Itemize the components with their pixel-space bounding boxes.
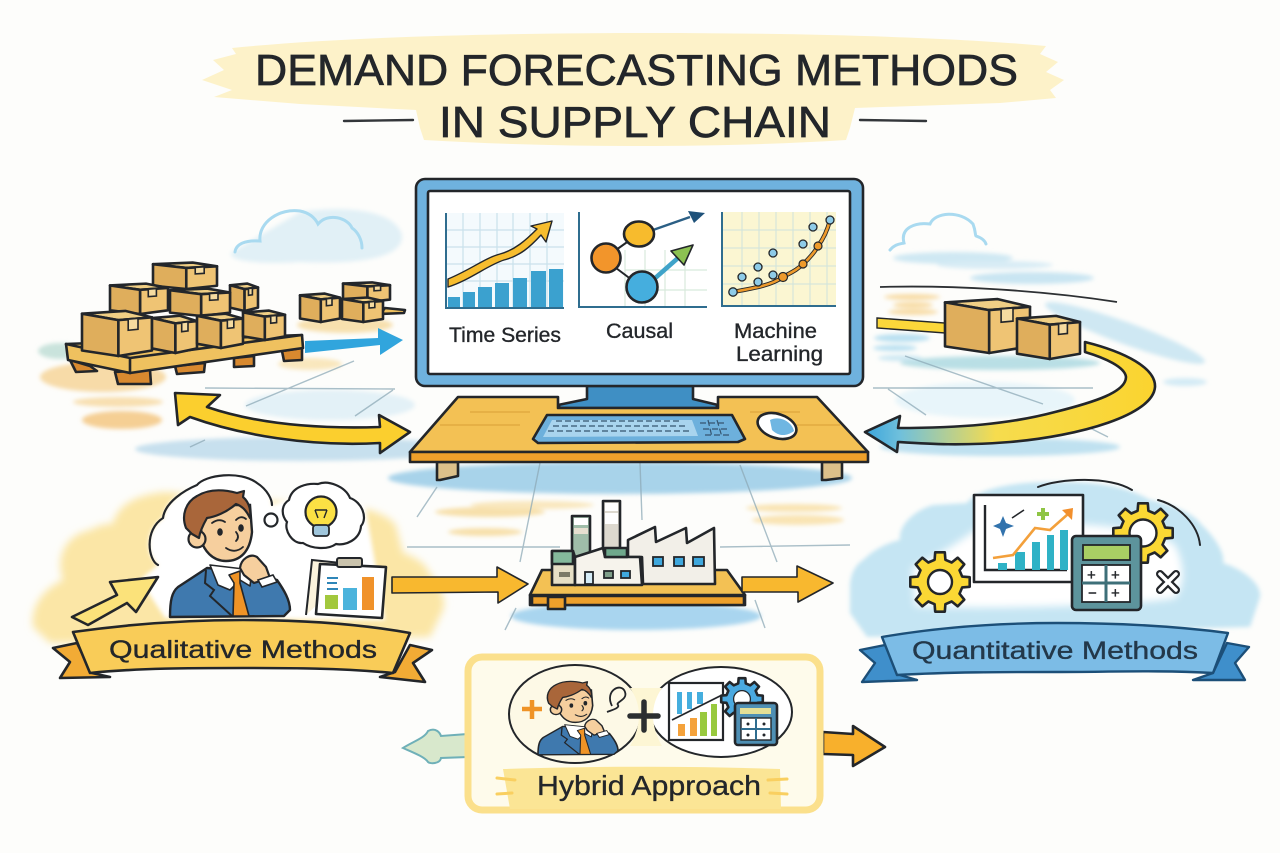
title line 2: IN SUPPLY CHAIN <box>439 98 831 147</box>
distant boxes <box>300 282 405 322</box>
arrow: pallet to monitor <box>305 328 403 355</box>
arrow: double-headed yellow <box>175 393 410 453</box>
monitor frame <box>416 179 863 386</box>
monitor <box>416 179 863 408</box>
idea bubble with bulb <box>283 483 364 548</box>
mouse <box>754 408 800 444</box>
desk front edge <box>410 452 868 462</box>
gear <box>721 678 763 720</box>
quantitative cloud <box>850 482 1260 637</box>
boxes on the right <box>877 299 1080 359</box>
floor washes and perspective lines <box>38 252 1209 630</box>
arrow: hybrid left <box>403 730 468 763</box>
qualitative icon: expert thinking <box>150 475 386 618</box>
label: time series: Time Series <box>449 324 561 347</box>
gear left <box>910 552 970 612</box>
thought squiggle <box>607 688 625 712</box>
chart: machine learning <box>722 212 836 306</box>
label: machine learning: Learning <box>736 343 823 366</box>
hybrid approach panel <box>468 657 820 810</box>
arrow: qualitative up-right <box>72 577 158 625</box>
calculator <box>735 703 777 745</box>
pallet <box>66 335 303 384</box>
arrow: big curved <box>865 342 1155 452</box>
label: causal: Causal <box>606 320 673 343</box>
keyboard <box>533 415 745 443</box>
windows <box>585 557 704 584</box>
left cloud <box>231 209 402 263</box>
label: Hybrid Approach <box>537 770 761 801</box>
pallet <box>530 570 745 605</box>
monitor screen <box>428 191 850 374</box>
calculator: + <box>1111 567 1120 584</box>
pallet of boxes <box>66 263 405 384</box>
right cloud <box>880 214 1117 302</box>
chart: causal <box>579 211 707 307</box>
clipboard with bars <box>306 558 386 618</box>
desk top <box>410 397 868 452</box>
desk legs <box>437 462 842 480</box>
stacked boxes <box>82 263 285 356</box>
monitor stand <box>558 386 718 408</box>
arrow: factory to quantitative <box>742 566 833 602</box>
calculator: − <box>1088 585 1097 602</box>
gear right <box>1113 503 1173 563</box>
ribbon: quantitative methods <box>860 623 1249 682</box>
title line 1: DEMAND FORECASTING METHODS <box>255 46 1018 95</box>
chart <box>669 683 723 740</box>
arrow: qualitative to factory <box>392 567 528 603</box>
title <box>202 33 1064 147</box>
big plus <box>630 702 658 730</box>
desk <box>410 397 868 480</box>
man figure <box>170 490 290 617</box>
ribbon: qualitative methods <box>53 620 432 682</box>
chart: time series <box>446 213 564 308</box>
orange plus <box>522 700 542 719</box>
calculator: + <box>1111 585 1120 602</box>
left oval <box>509 665 641 763</box>
thought outline <box>150 475 272 565</box>
quantitative icons <box>910 480 1200 612</box>
qualitative cloud <box>33 475 444 643</box>
label: Qualitative Methods <box>109 636 377 664</box>
right oval <box>650 667 792 757</box>
calculator <box>1072 536 1141 610</box>
label: machine learning: Machine <box>734 320 817 343</box>
title brush highlight <box>202 33 1064 146</box>
multiply sign <box>1160 574 1176 590</box>
label: Quantitative Methods <box>912 637 1198 665</box>
buildings <box>628 527 715 584</box>
man icon <box>538 681 618 755</box>
label banner <box>503 767 781 809</box>
panel frame <box>468 657 820 810</box>
arrow: hybrid right <box>823 726 885 766</box>
factory on pallet <box>530 501 745 609</box>
chart frame <box>974 495 1083 582</box>
calculator: + <box>1087 567 1096 584</box>
chimneys <box>572 516 590 560</box>
